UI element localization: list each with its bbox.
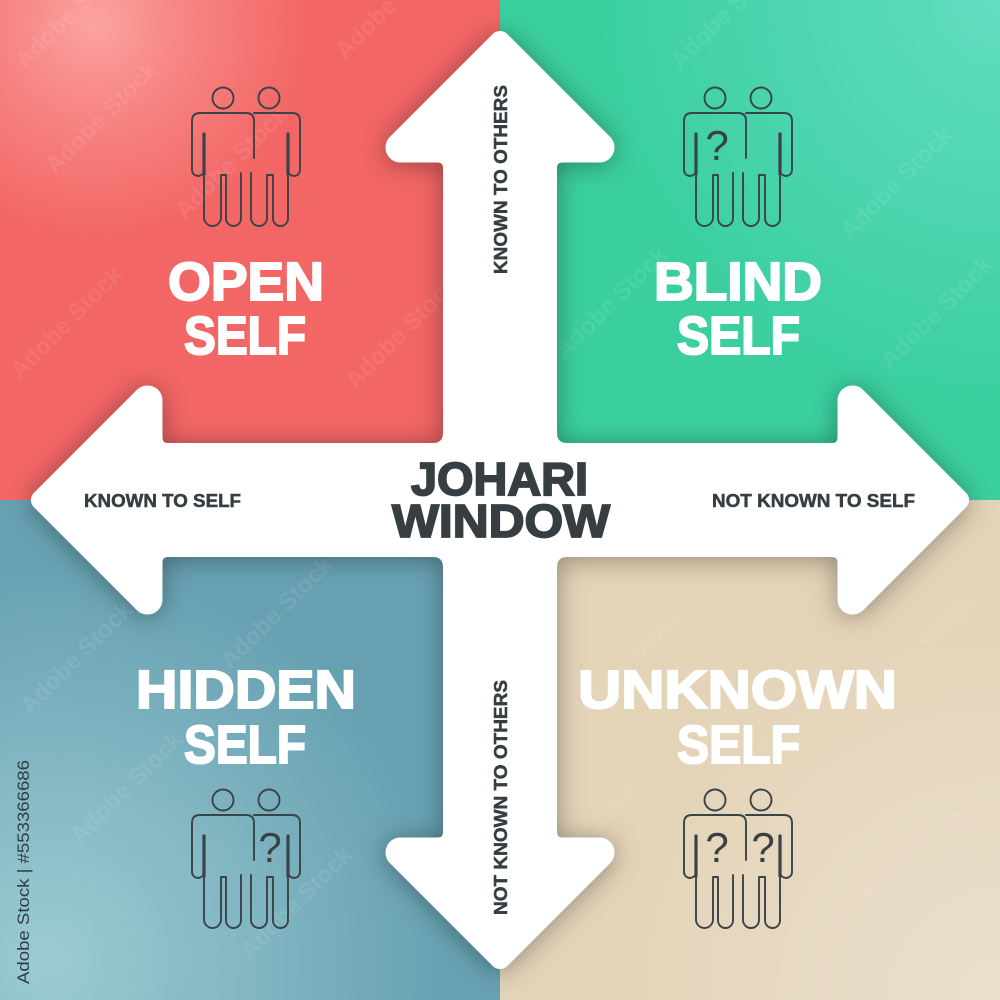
- text: Adobe Stock: [550, 241, 673, 364]
- heading: open self: [168, 252, 324, 366]
- heading: blind self: [654, 252, 822, 366]
- icon: question mark one: ?: [705, 824, 729, 871]
- heading: hidden self: [136, 660, 356, 775]
- heading: unknown self: UNKNOWN: [578, 660, 897, 720]
- icon: hidden self two people with question mark: [192, 790, 300, 928]
- title: johari window: WINDOW: [392, 495, 611, 547]
- text: Adobe Stock: [875, 251, 998, 374]
- text: Adobe Stock: [40, 56, 163, 179]
- stock image id text: Adobe Stock | #553366686: [14, 760, 33, 984]
- text: Adobe Stock: [520, 776, 643, 899]
- heading: open self: SELF: [184, 306, 306, 366]
- panel: hidden self background: [0, 500, 500, 1000]
- icon: open self two people: [192, 88, 300, 226]
- heading: blind self: BLIND: [654, 252, 822, 312]
- label: known to others: KNOWN TO OTHERS: [490, 85, 511, 274]
- text: Adobe Stock: [855, 786, 978, 909]
- text: Adobe Stock: [215, 551, 338, 674]
- text: Adobe Stock: [835, 121, 958, 244]
- icon: question mark: ?: [258, 824, 282, 871]
- label: known to self: KNOWN TO SELF: [84, 490, 241, 511]
- heading: blind self: SELF: [677, 306, 800, 366]
- heading: unknown self: SELF: [677, 715, 800, 775]
- panel: blind self background: [500, 0, 1000, 500]
- heading: hidden self: HIDDEN: [136, 660, 356, 720]
- icon: question mark two: ?: [751, 824, 775, 871]
- heading: unknown self: [578, 660, 897, 775]
- panel: open self background: [0, 0, 500, 500]
- text: Adobe Stock: [65, 726, 188, 849]
- heading: open self: OPEN: [168, 252, 324, 312]
- icon: blind self two people with question mark: [684, 88, 792, 226]
- title: johari window: [392, 453, 611, 547]
- text: Adobe Stock: [565, 601, 688, 724]
- text: Adobe Stock: [340, 271, 463, 394]
- text: Adobe Stock: [5, 261, 128, 384]
- icon: question mark: ?: [705, 122, 729, 169]
- text: Adobe Stock: [170, 101, 293, 224]
- panel: unknown self background: [500, 500, 1000, 1000]
- text: Adobe Stock: [235, 841, 358, 964]
- label: not known to self: NOT KNOWN TO SELF: [712, 490, 915, 511]
- text: Adobe Stock: [855, 591, 978, 714]
- label: not known to others: NOT KNOWN TO OTHERS: [490, 680, 511, 915]
- text: Adobe Stock: [15, 596, 138, 719]
- heading: hidden self: SELF: [184, 715, 306, 775]
- icon: unknown self two people with two question marks: [684, 790, 792, 928]
- title: johari window: JOHARI: [411, 453, 588, 505]
